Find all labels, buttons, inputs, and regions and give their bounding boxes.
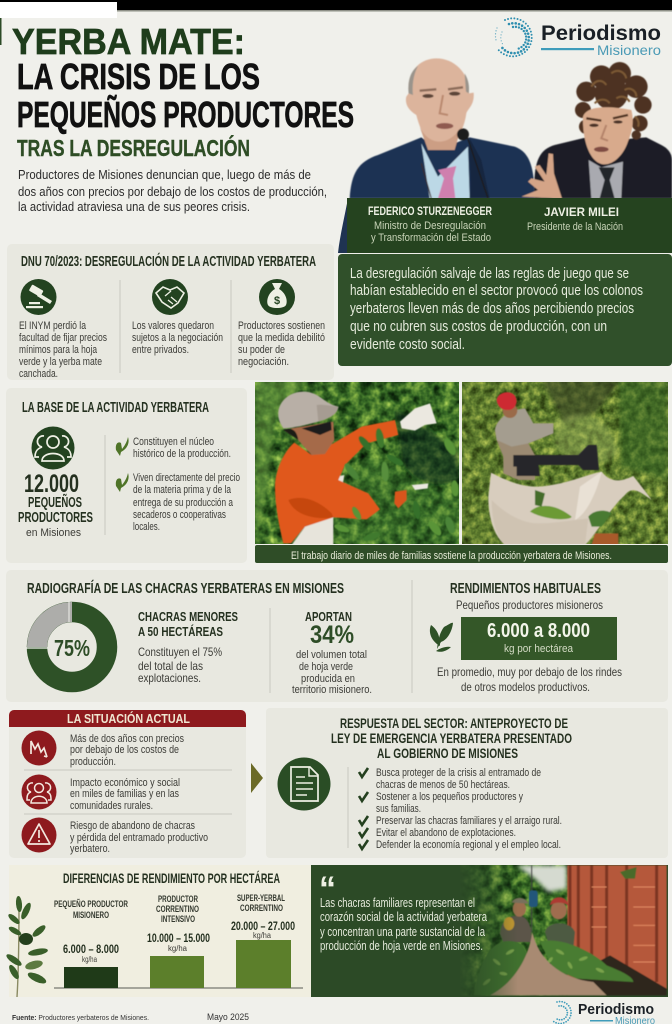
stat: 12.000 productores: 12.000 [24, 470, 79, 498]
text: productores: negociación. [238, 356, 289, 368]
text: riesgo [70, 820, 208, 855]
text: riesgo: yerbatero. [70, 843, 110, 855]
suit: Sturzenegger [350, 137, 535, 198]
checklist: sus familias. [376, 803, 421, 815]
text: impacto [70, 777, 180, 812]
logo: Periodismo Misionero: Misionero [597, 42, 661, 58]
icon: handshake [152, 279, 188, 315]
bar chart: rendimiento: 20.000 – 27.000 [231, 919, 295, 933]
text: precios [70, 733, 184, 768]
panel: quote on deregulation: que no cubren sus costos de producción, con un [350, 319, 607, 335]
checklist: Busca proteger de la crisis al entramado de [376, 767, 541, 779]
text: en promedio [437, 665, 622, 694]
text: impacto: en miles de familias y en las [70, 788, 179, 800]
text: viven [133, 472, 240, 533]
text: INYM [19, 320, 107, 380]
text: INYM: facultad de fijar precios [19, 332, 107, 344]
hand: Milei [521, 153, 562, 198]
face [291, 422, 334, 455]
title: YERBA MATE: [12, 21, 245, 62]
heading: DNU: DNU 70/2023: DESREGULACIÓN DE LA ACTIVIDAD YERBATERA [21, 252, 316, 270]
intro paragraph: la actividad atraviesa una de sus peores crisis. [18, 200, 250, 214]
panel: diferencias de rendimiento [5, 865, 311, 997]
stat: 12.000 productores: PEQUEÑOS [28, 493, 82, 511]
top black bar [0, 0, 672, 45]
icon: warning [22, 818, 56, 852]
quote text [320, 896, 487, 953]
heading: rendimientos habituales: Pequeños productores misioneros [456, 598, 603, 612]
icon: leaf bullet [116, 473, 129, 492]
bar chart: rendimiento: CORRENTINO [156, 904, 199, 914]
heading: respuesta: RESPUESTA DEL SECTOR: ANTEPROYECTO DE [340, 716, 568, 731]
bar chart: rendimiento: INTENSIVO [161, 914, 195, 924]
shirt and tie [421, 143, 470, 198]
text: viven: secaderos o cooperativas [133, 509, 226, 521]
footer source: Fuente: Productores yerbateros de Misiones. [12, 1013, 149, 1022]
panel: respuesta del sector [266, 708, 668, 858]
text: viven: Viven directamente del precio [133, 472, 240, 484]
foliage [473, 941, 527, 995]
bar chart: rendimiento: PEQUEÑO PRODUCTOR [54, 899, 128, 909]
panel: quote on chacras familiares [311, 865, 668, 997]
machine bar [513, 445, 599, 476]
text: INYM: verde y la yerba mate [19, 356, 102, 368]
checklist [359, 767, 562, 851]
panel: radiografía de las chacras [6, 570, 668, 702]
text: chacras menores [138, 609, 238, 685]
heading: respuesta: AL GOBIERNO DE MISIONES [377, 746, 518, 761]
quote text: y concentran una parte sustancial de la [320, 925, 485, 939]
text: valores [132, 320, 223, 356]
quote mark: “ [319, 870, 336, 908]
stat: 12.000 productores [18, 470, 93, 539]
icon: leaf bullet [116, 437, 129, 456]
checklist: Defender la economía regional y el empleo local. [376, 839, 561, 851]
panel: la situación actual [9, 710, 246, 858]
name captions panel: FEDERICO STURZENEGGER [368, 204, 492, 218]
photo: Sturzenegger and Milei [350, 58, 672, 198]
icon: families [22, 774, 56, 810]
icon: yerba leaf [430, 623, 453, 652]
text: chacras menores: explotaciones. [138, 671, 201, 685]
text: productores: que la medida debilitó [238, 332, 325, 344]
text: nucleo [133, 436, 231, 460]
panel: quote on deregulation [338, 254, 672, 366]
checklist: Preservar las chacras familiares y el arraigo rural. [376, 815, 562, 827]
name captions panel: Presidente de la Nación [527, 221, 623, 233]
stat: aportan 34%: producida en [301, 673, 355, 685]
name captions panel [338, 198, 672, 253]
name captions panel: Ministro de Desregulación [374, 220, 486, 232]
photo caption bar [255, 545, 668, 563]
text: viven: entrega de su producción a [133, 497, 234, 509]
text: en promedio: de otros modelos productivos. [461, 680, 590, 694]
stat: aportan 34%: APORTAN [305, 609, 352, 624]
text: productores [238, 320, 325, 368]
panel: quote on deregulation: evidente costo social. [350, 337, 465, 353]
heading: respuesta [331, 716, 572, 761]
intro paragraph: Productores de Misiones denuncian que, luego de más de [18, 168, 311, 182]
stat: aportan 34%: del volumen total [296, 649, 367, 661]
text: nucleo: Constituyen el núcleo [133, 436, 214, 448]
bar chart: rendimiento: 10.000 – 15.000 [147, 931, 210, 945]
footer source [12, 1012, 249, 1022]
bar chart: rendimiento: SUPER-YERBAL [237, 893, 285, 903]
photo: worker harvesting in orange shirt [255, 380, 460, 547]
text: impacto: comunidades rurales. [70, 800, 153, 812]
bar chart: rendimiento: kg/ha [253, 931, 271, 940]
checklist: Sostener a los pequeños productores y [376, 791, 523, 803]
title: TRAS LA DESREGULACIÓN [17, 134, 250, 161]
text: impacto: Impacto económico y social [70, 777, 180, 789]
title [12, 21, 354, 161]
red header [9, 710, 246, 727]
white apron [292, 517, 333, 545]
text: productores: Productores sostienen [238, 320, 325, 332]
sack [488, 472, 652, 545]
text: riesgo: Riesgo de abandono de chacras [70, 820, 195, 832]
text: en promedio: En promedio, muy por debajo de los rindes [437, 665, 622, 679]
text: valores: sujetos a la negociación [132, 332, 223, 344]
text: viven: locales. [133, 521, 160, 533]
text: precios: Más de dos años con precios [70, 733, 184, 745]
footer logo: Periodismo [578, 1001, 654, 1018]
text: productores: su poder de [238, 344, 285, 356]
text: chacras menores: del total de las [138, 659, 203, 673]
heading: diferencias: DIFERENCIAS DE RENDIMIENTO POR HECTÁREA [63, 870, 280, 886]
foreground leaves [333, 428, 459, 543]
text: chacras menores: CHACRAS MENORES [138, 609, 238, 624]
glove [400, 403, 437, 431]
hair: Milei [575, 62, 652, 140]
intro paragraph: dos años con precios por debajo de los costos de producción, [18, 185, 327, 199]
head: Sturzenegger [406, 58, 474, 147]
icon: money bag [259, 279, 295, 315]
logo: Periodismo Misionero [495, 18, 661, 58]
heading: respuesta: LEY DE EMERGENCIA YERBATERA PRESENTADO [331, 731, 572, 746]
callout: 6.000 a 8.000 [461, 617, 617, 660]
photo: worker and harvest sack [461, 380, 668, 547]
callout: 6.000 a 8.000: kg por hectárea [504, 643, 574, 655]
text: INYM: El INYM perdió la [19, 320, 87, 332]
cap [278, 392, 338, 428]
harvested leaves [530, 506, 572, 519]
microphone [457, 128, 469, 140]
stat: aportan 34%: 34% [310, 621, 354, 649]
checklist: Evitar el abandono de explotaciones. [376, 827, 516, 839]
stat: 12.000 productores: PRODUCTORES [18, 510, 93, 526]
worker left [500, 915, 532, 942]
stat: aportan 34%: territorio misionero. [292, 684, 372, 696]
bar chart: rendimiento [54, 893, 303, 988]
panel: la base de la actividad [6, 388, 247, 563]
title: LA CRISIS DE LOS [17, 56, 260, 97]
donut chart 75% [26, 601, 107, 682]
icon: gavel [20, 279, 56, 315]
text: viven: de la materia prima y de la [133, 484, 232, 496]
text: chacras menores: A 50 HECTÁREAS [138, 624, 223, 639]
quote text: producción de hoja verde en Misiones. [320, 939, 483, 953]
orange shirt [275, 420, 398, 543]
footer source: Mayo 2025 [207, 1012, 249, 1022]
text: INYM: canchada. [19, 368, 58, 380]
heading: base: LA BASE DE LA ACTIVIDAD YERBATERA [22, 400, 209, 416]
head: Milei [583, 107, 633, 164]
text: INYM: mínimos para la hoja [19, 344, 98, 356]
heading: rendimientos habituales [450, 581, 603, 612]
intro paragraph [18, 168, 327, 214]
stat: 12.000 productores: en Misiones [26, 527, 81, 539]
worker body [496, 440, 536, 480]
stat: aportan 34%: de hoja verde [299, 661, 353, 673]
donut chart 75%: 75% [54, 635, 90, 661]
sack [490, 932, 607, 995]
red header: LA SITUACIÓN ACTUAL [67, 711, 190, 726]
icon: people [32, 426, 74, 470]
stat: aportan 34% [292, 609, 372, 696]
checklist: chacras de menos de 50 hectáreas. [376, 779, 510, 791]
suit: Milei [534, 137, 672, 198]
icon: document [278, 758, 330, 810]
red truck [567, 865, 667, 989]
text: precios: por debajo de los costos de [70, 744, 179, 756]
icon: money bag: $ [274, 295, 280, 307]
fade [458, 865, 518, 997]
quote text: corazón social de la actividad yerbatera [320, 910, 487, 924]
name captions panel: y Transformación del Estado [371, 232, 491, 244]
photo: workers by the truck [460, 865, 667, 995]
icon: falling chart [22, 730, 56, 766]
heading: radiografía: RADIOGRAFÍA DE LAS CHACRAS YERBATERAS EN MISIONES [27, 580, 344, 597]
bar chart: rendimiento: kg/ha [168, 944, 188, 953]
name captions panel: JAVIER MILEI [544, 205, 619, 219]
text: riesgo: y pérdida del entramado productivo [70, 832, 208, 844]
hook [530, 865, 533, 932]
footer logo [553, 1001, 655, 1024]
panel: DNU 70/2023 [7, 244, 334, 380]
callout: 6.000 a 8.000: 6.000 a 8.000 [487, 620, 590, 642]
bar chart: rendimiento: PRODUCTOR [158, 894, 198, 904]
text: chacras menores: Constituyen el 75% [138, 645, 222, 659]
bar chart: rendimiento: MISIONERO [73, 910, 109, 920]
arrow [251, 763, 263, 793]
quote text: Las chacras familiares representan el [320, 896, 475, 910]
logo: Periodismo Misionero: Periodismo [541, 22, 661, 45]
text: nucleo: histórico de la producción. [133, 448, 231, 460]
bar chart: rendimiento: 6.000 – 8.000 [63, 942, 119, 956]
text: valores: Los valores quedaron [132, 320, 214, 332]
title: PEQUEÑOS PRODUCTORES [17, 93, 354, 135]
worker right [545, 923, 575, 949]
heading: rendimientos habituales: RENDIMIENTOS HABITUALES [450, 581, 601, 597]
bar chart: rendimiento: CORRENTINO [240, 903, 283, 913]
text: precios: producción. [70, 756, 116, 768]
text: valores: entre privados. [132, 344, 189, 356]
icon: yerba plant [5, 896, 48, 997]
bar chart: rendimiento: kg/ha [82, 955, 97, 964]
